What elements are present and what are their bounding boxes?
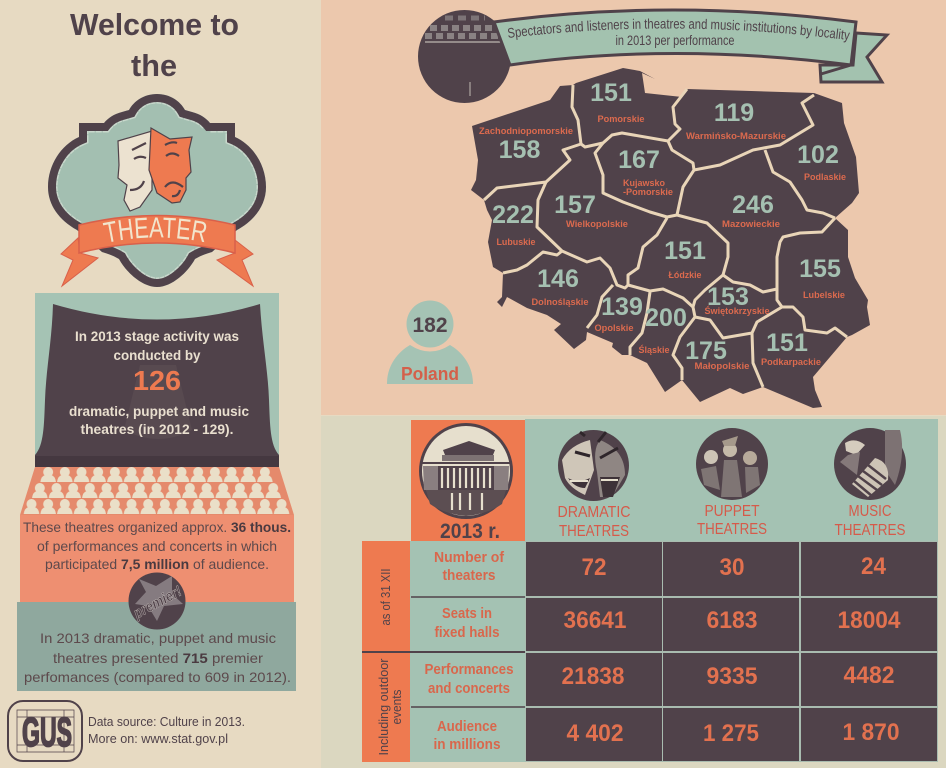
region values: 175 (685, 337, 727, 365)
data cells: 1 870 (842, 719, 900, 746)
data cells: 6183 (706, 607, 758, 634)
panel: premieres: perfomances (compared to 609 in 2012). (24, 669, 291, 685)
region values: 222 (492, 201, 534, 229)
Poland average figure (387, 300, 473, 384)
column headings (558, 503, 906, 540)
stage text: In 2013 stage activity was (75, 328, 239, 344)
region names: Opolskie (594, 323, 634, 334)
data cells: 18004 (838, 607, 901, 634)
region names: Wielkopolskie (566, 219, 628, 230)
side group labels: Including outdoor (376, 658, 391, 756)
region names: Podlaskie (804, 172, 846, 183)
stage text: dramatic, puppet and music (69, 403, 249, 419)
table (362, 419, 938, 762)
region values: 246 (732, 191, 774, 219)
region values: 155 (799, 255, 841, 283)
row labels: Number of (434, 549, 505, 566)
region names: Świętokrzyskie (704, 305, 770, 317)
data cells: 36641 (564, 607, 626, 634)
logo: GUS (8, 701, 82, 761)
header: year cell: 2013 r. (440, 520, 500, 543)
region names: Podkarpackie (761, 357, 821, 368)
side group labels: events (389, 689, 404, 724)
region names: Lubelskie (803, 290, 845, 301)
row labels: in millions (434, 736, 500, 753)
region values: 153 (707, 283, 749, 311)
side group labels: as of 31 XII (378, 568, 393, 626)
panel: performances: These theatres organized approx. 36 thous. (23, 519, 291, 535)
data cells: 72 (582, 554, 606, 581)
data cells: 1 275 (703, 720, 759, 747)
region names: Mazowieckie (722, 219, 780, 230)
region names: Łódzkie (668, 270, 702, 281)
ribbon band (494, 10, 856, 65)
region borders (484, 85, 847, 387)
column headings: THEATRES (559, 523, 629, 540)
banner with THEATER (78, 214, 236, 254)
region names: Kujawsko (623, 178, 665, 189)
row labels: theaters (442, 567, 496, 584)
panel: audience seats (20, 466, 294, 515)
map silhouette (471, 68, 870, 408)
side group labels (362, 541, 526, 762)
data cells: 9335 (706, 663, 758, 690)
icon: tragedy mask (149, 128, 192, 203)
curtain (35, 304, 279, 466)
title: the (131, 48, 177, 83)
panel: premieres (17, 602, 296, 691)
row labels: and concerts (428, 680, 510, 697)
region values: 151 (664, 237, 706, 265)
stage text (69, 328, 249, 437)
region names: Zachodniopomorskie (479, 126, 573, 137)
header: column band (525, 419, 938, 541)
region values: 146 (537, 265, 579, 293)
row labels: Seats in (442, 605, 492, 622)
region names: -Pomorskie (623, 187, 673, 198)
panel: map background (321, 0, 946, 415)
panel: performances: of performances and concerts in which (37, 538, 277, 554)
data source note: More on: www.stat.gov.pl (88, 731, 228, 746)
Poland average figure: Poland (401, 364, 459, 384)
heading text: Spectators and listeners in theatres and music institutions by locality (508, 18, 850, 42)
heading second line: in 2013 per performance (616, 32, 735, 48)
icon: microphone (834, 428, 906, 500)
emblem: theater masks badge (48, 94, 266, 288)
panel: table background (321, 416, 946, 768)
region names: Lubuskie (496, 237, 536, 248)
data source note (88, 714, 245, 746)
banner with THEATER: THEATER (102, 218, 206, 242)
Poland average figure: 182 (412, 314, 448, 337)
region values: 200 (645, 304, 687, 332)
region names (479, 114, 846, 372)
column headings: MUSIC (848, 503, 892, 520)
icon: puppets (696, 428, 768, 500)
region names: Małopolskie (694, 361, 750, 372)
region values: 139 (601, 293, 643, 321)
data source note: Data source: Culture in 2013. (88, 714, 245, 729)
stage floor (35, 456, 279, 467)
data cells: 4482 (844, 662, 894, 689)
region values: 167 (618, 146, 660, 174)
region values: 151 (766, 329, 808, 357)
column headings: DRAMATIC (558, 504, 630, 521)
region values: 158 (499, 136, 540, 164)
column headings: THEATRES (697, 521, 767, 538)
region values (492, 79, 841, 365)
row labels: Performances (424, 661, 514, 678)
logo: GUS: GUS (22, 709, 72, 755)
region values: 102 (797, 141, 839, 169)
spotlight (124, 365, 192, 439)
panel: premieres: theatres presented 715 premier (53, 650, 263, 666)
icon: premier star badge (128, 572, 186, 630)
stage text: 126 (133, 365, 181, 396)
icon: dramatic faces (558, 430, 629, 501)
stage text: conducted by (114, 347, 201, 363)
title (70, 7, 239, 83)
region values: 157 (554, 191, 596, 219)
ribbon heading (494, 8, 890, 84)
column headings: PUPPET (704, 503, 760, 520)
panel: performances: participated 7,5 million of audience. (45, 556, 269, 572)
region names: Warmińsko-Mazurskie (686, 131, 786, 142)
data cells: 4 402 (566, 720, 624, 747)
icon: premier star badge: premier! (130, 583, 185, 623)
row labels (410, 541, 526, 762)
panel: performances (20, 515, 294, 603)
panel: premieres: In 2013 dramatic, puppet and music (40, 630, 276, 646)
stage text: theatres (in 2012 - 129). (80, 421, 234, 437)
row labels: Audience (437, 718, 497, 735)
title: Welcome to (70, 7, 239, 42)
icon: comedy mask (118, 131, 152, 211)
ribbon tail (820, 33, 887, 82)
header: year cell (411, 420, 525, 543)
region names: Dolnośląskie (532, 297, 588, 308)
data cells: 21838 (562, 663, 624, 690)
region names: Śląskie (638, 344, 670, 356)
row labels: fixed halls (434, 624, 500, 641)
data cells: 30 (720, 554, 744, 581)
data cells: 24 (861, 553, 887, 580)
badge frame (48, 94, 266, 287)
panel: left background (0, 0, 320, 768)
icon: theatre interior photo (418, 10, 511, 103)
stage backdrop (35, 293, 279, 458)
region values: 151 (590, 79, 632, 107)
panel: stage (35, 293, 279, 467)
map of Poland (471, 68, 870, 408)
region names: Pomorskie (598, 114, 644, 125)
ribbon tails (61, 238, 253, 286)
region values: 119 (714, 99, 754, 127)
data cells (525, 541, 938, 762)
column headings: THEATRES (834, 522, 906, 539)
